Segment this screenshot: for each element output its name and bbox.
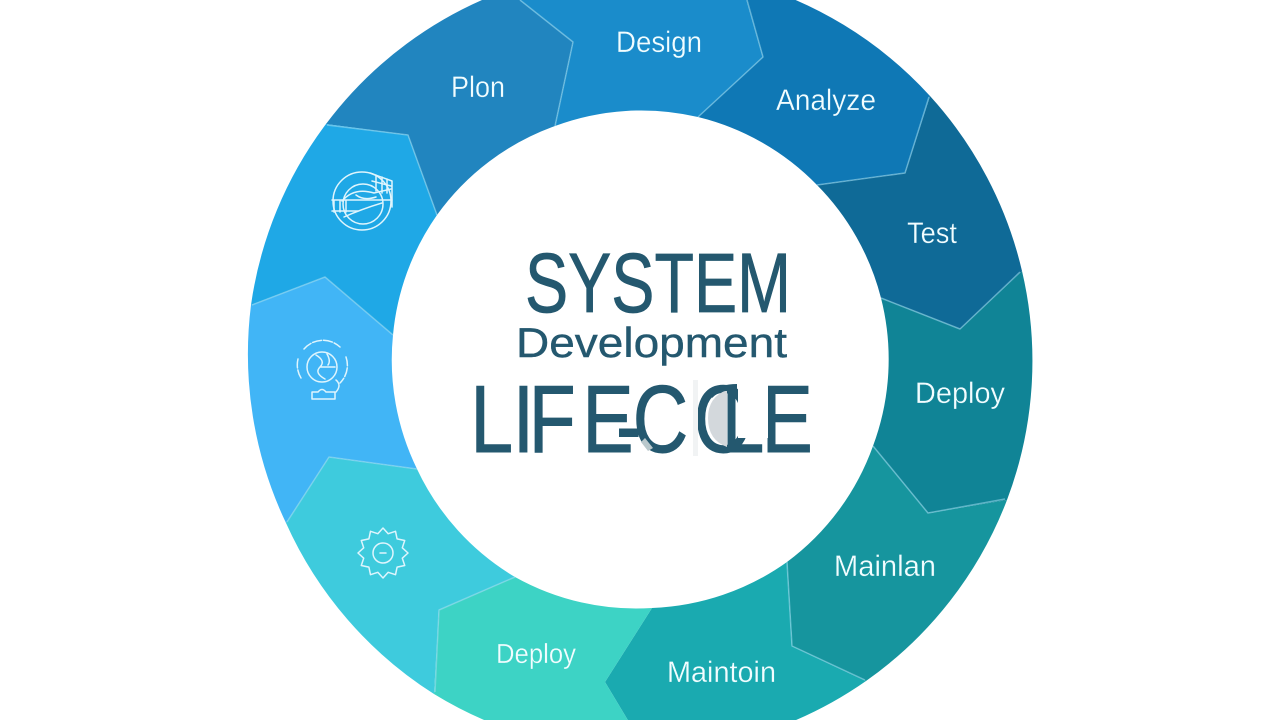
segment: gear	[286, 457, 515, 694]
title: LIFE-CCLE: LIFE-CCLE	[470, 366, 813, 479]
segment: Analyze: Analyze	[776, 84, 876, 117]
segment: Maintoin	[605, 562, 866, 720]
segment: Deploy: Deploy	[915, 377, 1005, 410]
title: SYSTEM: SYSTEM	[525, 236, 791, 330]
segment: Maintain	[787, 446, 1007, 681]
segment: Deploy lower: Deploy	[496, 638, 576, 669]
segment: Plan	[326, 0, 573, 215]
segment: Test	[817, 96, 1022, 329]
icon: globe on stand	[297, 340, 347, 399]
segment: Deploy lower	[434, 577, 652, 720]
cycle ring	[248, 0, 1032, 720]
segment: bright blue	[251, 124, 437, 335]
segment: Analyze	[698, 0, 930, 185]
segment: Maintain: Mainlan	[834, 550, 936, 583]
segment: Plan: Plon	[451, 71, 505, 104]
icon: gear	[358, 528, 408, 578]
segment: Design	[507, 0, 763, 126]
segment: Design: Design	[616, 26, 702, 59]
segment: Deploy	[873, 271, 1032, 513]
segment: Test: Test	[907, 217, 958, 250]
segment: Maintoin: Maintoin	[667, 656, 776, 689]
title block	[470, 236, 813, 479]
segment: light blue	[248, 277, 417, 523]
title: Development: Development	[516, 319, 787, 366]
icon: globe with grid	[332, 172, 392, 230]
